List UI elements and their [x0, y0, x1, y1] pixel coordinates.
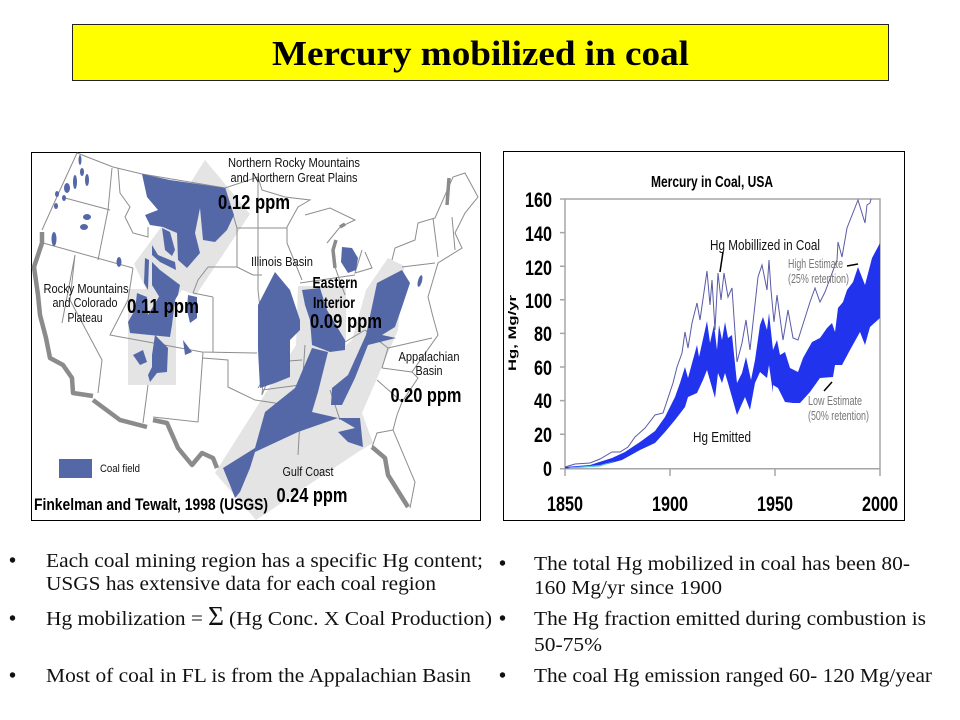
region labels: Appalachian [398, 350, 460, 364]
region labels: Interior [313, 295, 355, 312]
text block: right bullets: 160 Mg/yr since 1900 [534, 577, 722, 599]
y axis labels [525, 189, 552, 481]
y axis labels: 0 [543, 458, 552, 481]
y axis labels: 40 [534, 390, 552, 413]
text block: left bullets: Σ [208, 601, 224, 631]
x axis labels: 1900 [652, 493, 688, 516]
y axis labels: 120 [525, 257, 552, 280]
mobilized mercury line [565, 199, 871, 467]
series labels: High Estimate [788, 256, 843, 271]
y axis labels: 60 [534, 357, 552, 380]
legend: coal field swatch: Coal field [100, 463, 140, 475]
region labels: and Northern Great Plains [230, 171, 358, 185]
thick gray border and water edges [34, 178, 449, 507]
region labels: 0.11 ppm [127, 296, 199, 318]
series labels [693, 237, 869, 446]
x axis labels: 1850 [547, 493, 583, 516]
text block: right bullets: 50-75% [534, 634, 602, 656]
text block: left bullets: • [9, 550, 16, 572]
chart title: Mercury in Coal, USA [651, 174, 773, 191]
text block: left bullets: Hg mobilization = [46, 608, 203, 630]
legend: coal field swatch [59, 459, 140, 478]
map source credit: Finkelman and Tewalt, 1998 (USGS) [34, 495, 268, 514]
text block: left bullets: Most of coal in FL is from the Appalachian Basin [46, 665, 471, 687]
region labels: Basin [416, 364, 443, 378]
region labels: 0.12 ppm [218, 192, 290, 214]
text block: right bullets: The total Hg mobilized in coal has been 80- [534, 553, 910, 575]
region labels: Northern Rocky Mountains [228, 156, 360, 170]
text block: right bullets [499, 553, 932, 687]
light band at start [568, 461, 615, 468]
text block: right bullets: The Hg fraction emitted during combustion is [534, 608, 926, 630]
text block: left bullets: USGS has extensive data for each coal region [46, 573, 436, 595]
panel: mercury in coal chart [504, 152, 904, 520]
region labels: Eastern [312, 275, 358, 292]
region labels: Illinois Basin [251, 255, 313, 269]
x axis labels: 2000 [862, 493, 898, 516]
y axis labels: 160 [525, 189, 552, 212]
text block: left bullets: • [9, 665, 16, 687]
chart axes [560, 199, 880, 476]
emitted mercury band [565, 243, 880, 468]
region labels: Gulf Coast [282, 465, 334, 479]
region labels: Rocky Mountains [44, 282, 128, 296]
state and coast lines [42, 153, 478, 508]
y axis labels: 80 [534, 323, 552, 346]
text block: right bullets: • [499, 608, 506, 630]
text block: left bullets: (Hg Conc. X Coal Production) [229, 608, 492, 630]
panel: coal field map of USA [32, 152, 480, 520]
title banner: Mercury mobilized in coal [272, 34, 689, 73]
region labels: Plateau [68, 311, 103, 325]
y axis title: Hg, Mg/yr [507, 294, 519, 371]
text block: left bullets: Each coal mining region has a specific Hg content; [46, 550, 483, 572]
coal region shading [128, 160, 404, 520]
coal fields [52, 155, 423, 498]
region labels: 0.09 ppm [310, 311, 382, 333]
region labels: 0.20 ppm [390, 385, 462, 407]
text block: left bullets: • [9, 608, 16, 630]
y axis labels: 140 [525, 223, 552, 246]
region labels: and Colorado [52, 296, 118, 310]
y axis labels: 20 [534, 424, 552, 447]
x axis labels [547, 493, 898, 516]
series labels: Low Estimate [808, 393, 862, 408]
text block: right bullets: • [499, 553, 506, 575]
series labels: (25% retention) [788, 271, 849, 286]
region labels [44, 156, 462, 507]
text block: right bullets: The coal Hg emission ranged 60- 120 Mg/year [534, 665, 932, 687]
text block: right bullets: • [499, 665, 506, 687]
y axis labels: 100 [525, 290, 552, 313]
series labels: (50% retention) [808, 408, 869, 423]
x axis labels: 1950 [757, 493, 793, 516]
title banner [72, 24, 888, 80]
series labels: Hg Mobillized in Coal [710, 237, 820, 254]
text block: left bullets [9, 550, 492, 687]
series labels: Hg Emitted [693, 429, 751, 446]
region labels: 0.24 ppm [276, 485, 348, 507]
